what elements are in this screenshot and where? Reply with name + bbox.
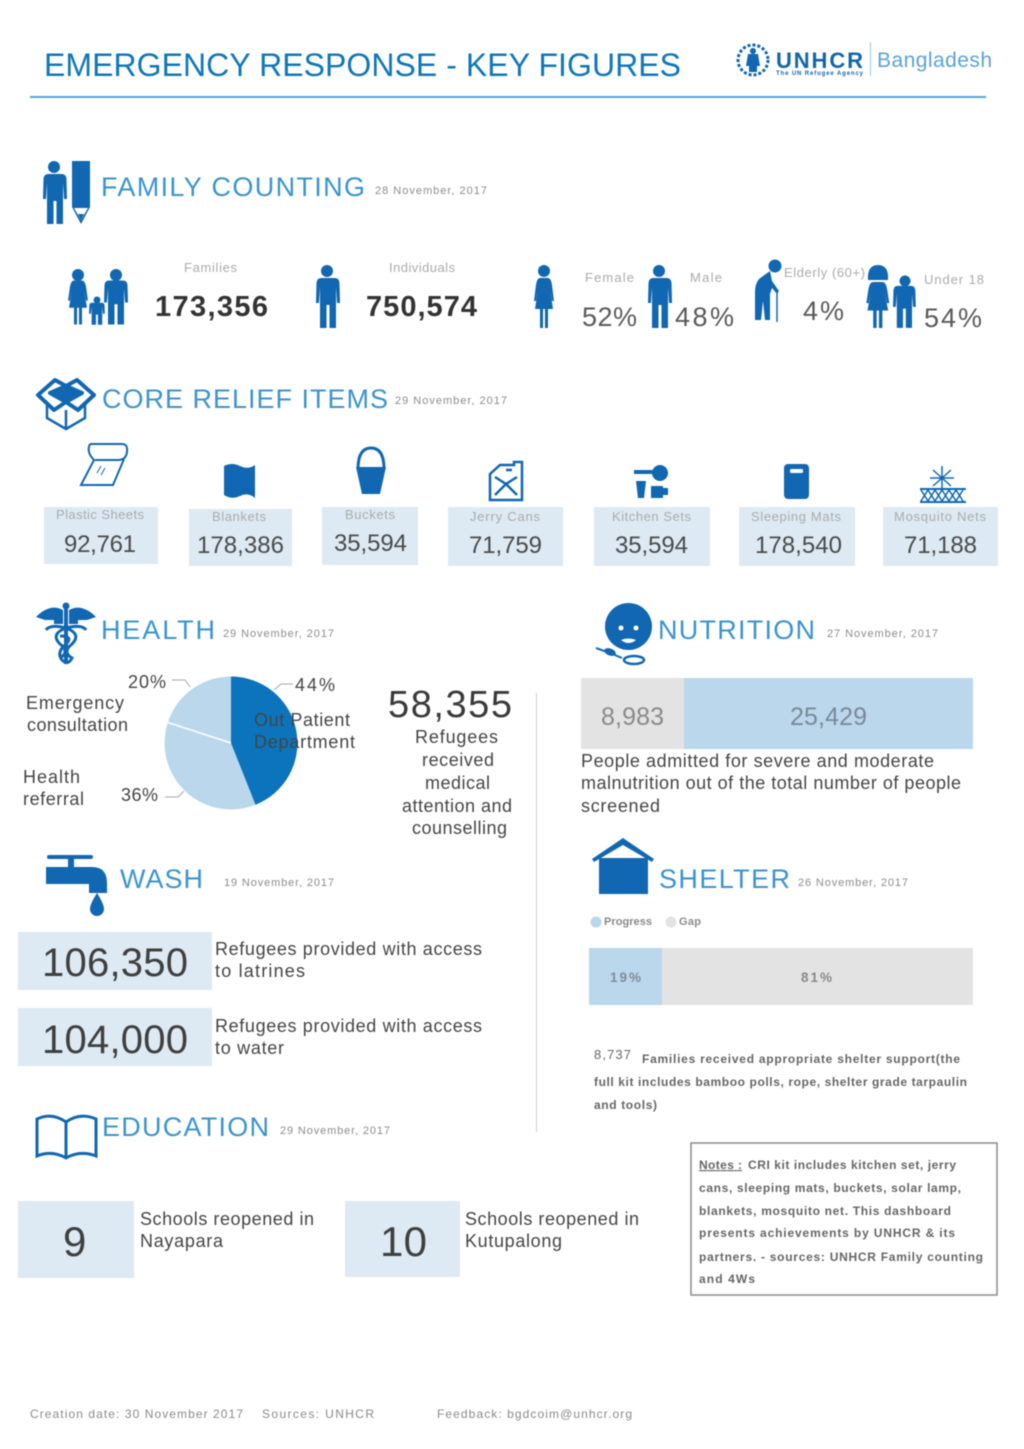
logo: UNHCR Bangladesh: Bangladesh xyxy=(877,49,992,72)
nutrition description: screened xyxy=(581,796,660,816)
stacked bar: shelter progress: 81% xyxy=(801,970,832,985)
item: blankets: Blankets xyxy=(212,509,266,524)
families label: Families xyxy=(184,260,238,275)
item: sleeping mats: Sleeping Mats xyxy=(751,509,842,524)
pie label: emergency: consultation xyxy=(27,715,128,735)
elderly label: Elderly (60+) xyxy=(784,265,865,280)
stacked bar: screened and admitted: 25,429 xyxy=(790,703,867,731)
notes box: Notes : xyxy=(699,1158,742,1172)
item: blankets: 178,386 xyxy=(197,532,284,559)
date: 29 November, 2017 xyxy=(395,395,507,407)
legend: Gap xyxy=(679,916,701,928)
individuals label: Individuals xyxy=(389,260,456,275)
icon: plastic sheet roll xyxy=(81,444,127,485)
icon: sleeping mat xyxy=(784,464,809,499)
notes box: partners. - sources: UNHCR Family counting xyxy=(699,1250,983,1264)
female label: Female xyxy=(585,270,634,285)
shelter description: full kit includes bamboo polls, rope, shelter grade tarpaulin xyxy=(594,1075,967,1089)
shelter description: 8,737 xyxy=(594,1047,631,1062)
nutrition description: malnutrition out of the total number of people xyxy=(581,773,961,793)
stat: nayapara: Nayapara xyxy=(140,1231,224,1251)
stat: water: to water xyxy=(215,1038,284,1058)
icon: caduceus xyxy=(36,602,96,664)
date: 28 November, 2017 xyxy=(375,185,487,197)
pie label: outpatient xyxy=(254,675,355,752)
notes box: and 4Ws xyxy=(699,1272,755,1286)
pie label: outpatient: 44% xyxy=(295,675,335,695)
stat: kutupalong: Schools reopened in xyxy=(465,1209,639,1229)
icon: kitchen set xyxy=(634,465,668,498)
item: jerry cans: Jerry Cans xyxy=(470,509,540,524)
item: mosquito nets xyxy=(883,466,998,566)
panel: shelter xyxy=(589,838,973,1112)
icon: water tap xyxy=(46,855,107,916)
panel: nutrition xyxy=(581,603,973,816)
panel: health xyxy=(23,602,512,838)
item: jerry cans xyxy=(448,462,563,566)
stat: latrines xyxy=(18,932,482,990)
shelter description: Families received appropriate shelter support(the xyxy=(642,1052,960,1066)
stat: water xyxy=(18,1008,482,1066)
notes box xyxy=(691,1143,997,1295)
shelter description xyxy=(594,1047,967,1112)
logo: UNHCR Bangladesh: The UN Refugee Agency xyxy=(776,71,864,77)
nutrition description: People admitted for severe and moderate xyxy=(581,751,934,771)
stat: nayapara: Schools reopened in xyxy=(140,1209,314,1229)
heading: nutrition: NUTRITION xyxy=(658,615,815,645)
icon: mosquito net xyxy=(920,466,966,502)
icon: jerry can xyxy=(490,462,522,500)
date: 29 November, 2017 xyxy=(223,628,334,640)
under 18 label: Under 18 xyxy=(924,272,984,287)
male label: Male xyxy=(690,270,722,285)
icon: person and pencil xyxy=(43,161,90,224)
pie label: referral: referral xyxy=(23,789,84,809)
stat: kutupalong: 10 xyxy=(380,1218,427,1265)
health description: Refugees xyxy=(415,727,498,747)
date: 27 November, 2017 xyxy=(827,628,938,640)
icon: children xyxy=(866,265,916,328)
item: jerry cans: 71,759 xyxy=(469,532,542,559)
pie label: outpatient: Out Patient xyxy=(254,710,350,730)
male percentage: 48% xyxy=(675,302,734,332)
title: EMERGENCY RESPONSE - KEY FIGURES xyxy=(44,47,681,83)
icon: elderly person xyxy=(755,260,782,322)
icon: blanket xyxy=(224,464,255,498)
item: mosquito nets: Mosquito Nets xyxy=(894,509,986,524)
item: blankets xyxy=(189,464,292,566)
heading: wash: WASH xyxy=(120,864,203,894)
health figure: 58,355 xyxy=(388,684,512,726)
item: mosquito nets: 71,188 xyxy=(904,532,977,559)
stat: nayapara xyxy=(18,1201,314,1278)
footer xyxy=(30,1407,632,1421)
logo: UNHCR Bangladesh xyxy=(738,42,992,77)
stat: water: Refugees provided with access xyxy=(215,1016,482,1036)
heading: core relief items: CORE RELIEF ITEMS xyxy=(102,384,388,414)
heading: family counting: FAMILY COUNTING xyxy=(101,172,365,202)
item: plastic sheets: Plastic Sheets xyxy=(56,507,144,522)
heading: health: HEALTH xyxy=(101,615,215,645)
health description xyxy=(402,727,512,838)
pie label: outpatient: Department xyxy=(254,732,355,752)
stat: kutupalong xyxy=(345,1201,639,1277)
stacked bar: screened and admitted xyxy=(581,678,973,749)
heading: shelter: SHELTER xyxy=(659,864,790,894)
pie label: emergency xyxy=(26,672,166,735)
pie label: emergency: Emergency xyxy=(26,693,124,713)
elderly percentage: 4% xyxy=(803,296,844,326)
icon: bucket xyxy=(356,448,386,494)
date: 29 November, 2017 xyxy=(280,1125,390,1137)
notes box: cans, sleeping mats, buckets, solar lamp, xyxy=(699,1181,961,1195)
panel: wash xyxy=(18,855,482,1066)
date: 26 November, 2017 xyxy=(798,877,908,889)
pie chart xyxy=(165,676,297,809)
panel: core relief items xyxy=(38,380,998,566)
icon: female xyxy=(534,265,554,328)
stat: water: 104,000 xyxy=(42,1018,188,1062)
stat: nayapara: 9 xyxy=(63,1218,86,1265)
under 18 percentage: 54% xyxy=(924,303,982,333)
pie label: referral: 36% xyxy=(121,785,158,805)
pie label: referral xyxy=(23,767,158,809)
footer: Creation date: 30 November 2017 xyxy=(30,1407,243,1421)
stacked bar: shelter progress: 19% xyxy=(610,970,641,985)
item: plastic sheets: 92,761 xyxy=(64,531,136,558)
icon: face with spoon xyxy=(596,603,652,664)
notes box: blankets, mosquito net. This dashboard xyxy=(699,1204,951,1218)
health description: counselling xyxy=(412,818,507,838)
health description: received xyxy=(422,750,494,770)
nutrition description xyxy=(581,751,961,816)
icon: open book xyxy=(37,1116,96,1158)
families value: 173,356 xyxy=(155,291,268,323)
heading: education: EDUCATION xyxy=(102,1112,269,1142)
stat: kutupalong: Kutupalong xyxy=(465,1231,562,1251)
icon: male xyxy=(648,265,672,328)
stacked bar: shelter progress xyxy=(589,948,973,1005)
footer: Sources: UNHCR xyxy=(262,1407,374,1421)
item: sleeping mats: 178,540 xyxy=(755,532,842,559)
pie label: referral: Health xyxy=(23,767,80,787)
logo: UNHCR Bangladesh: UNHCR xyxy=(776,48,863,73)
date: 19 November, 2017 xyxy=(224,877,334,889)
stat: latrines: to latrines xyxy=(215,961,305,981)
item: sleeping mats xyxy=(739,464,855,566)
icon: open box xyxy=(38,380,94,429)
notes box: CRI kit includes kitchen set, jerry xyxy=(748,1158,956,1172)
icon: individual xyxy=(316,265,340,328)
legend xyxy=(590,916,701,928)
footer: Feedback: bgdcoim@unhcr.org xyxy=(437,1407,632,1421)
item: plastic sheets xyxy=(44,444,158,564)
item: buckets xyxy=(322,448,418,565)
pie label: emergency: 20% xyxy=(128,672,166,692)
item: kitchen sets: 35,594 xyxy=(615,532,688,559)
notes box: presents achievements by UNHCR & its xyxy=(699,1226,955,1240)
stat: latrines: 106,350 xyxy=(42,941,188,985)
health description: attention and xyxy=(402,796,512,816)
stat: latrines: Refugees provided with access xyxy=(215,939,482,959)
item: buckets: Buckets xyxy=(345,507,396,522)
panel: family counting xyxy=(43,161,984,333)
icon: house xyxy=(592,838,654,894)
female percentage: 52% xyxy=(582,302,637,332)
shelter description: and tools) xyxy=(594,1098,657,1112)
stacked bar: screened and admitted: 8,983 xyxy=(601,703,664,731)
panel: education xyxy=(18,1112,639,1278)
health description: medical xyxy=(425,773,490,793)
item: kitchen sets: Kitchen Sets xyxy=(612,509,692,524)
icon: family xyxy=(68,269,128,325)
item: buckets: 35,594 xyxy=(334,530,407,557)
item: kitchen sets xyxy=(594,465,710,566)
individuals value: 750,574 xyxy=(366,291,477,323)
legend: Progress xyxy=(604,916,652,928)
